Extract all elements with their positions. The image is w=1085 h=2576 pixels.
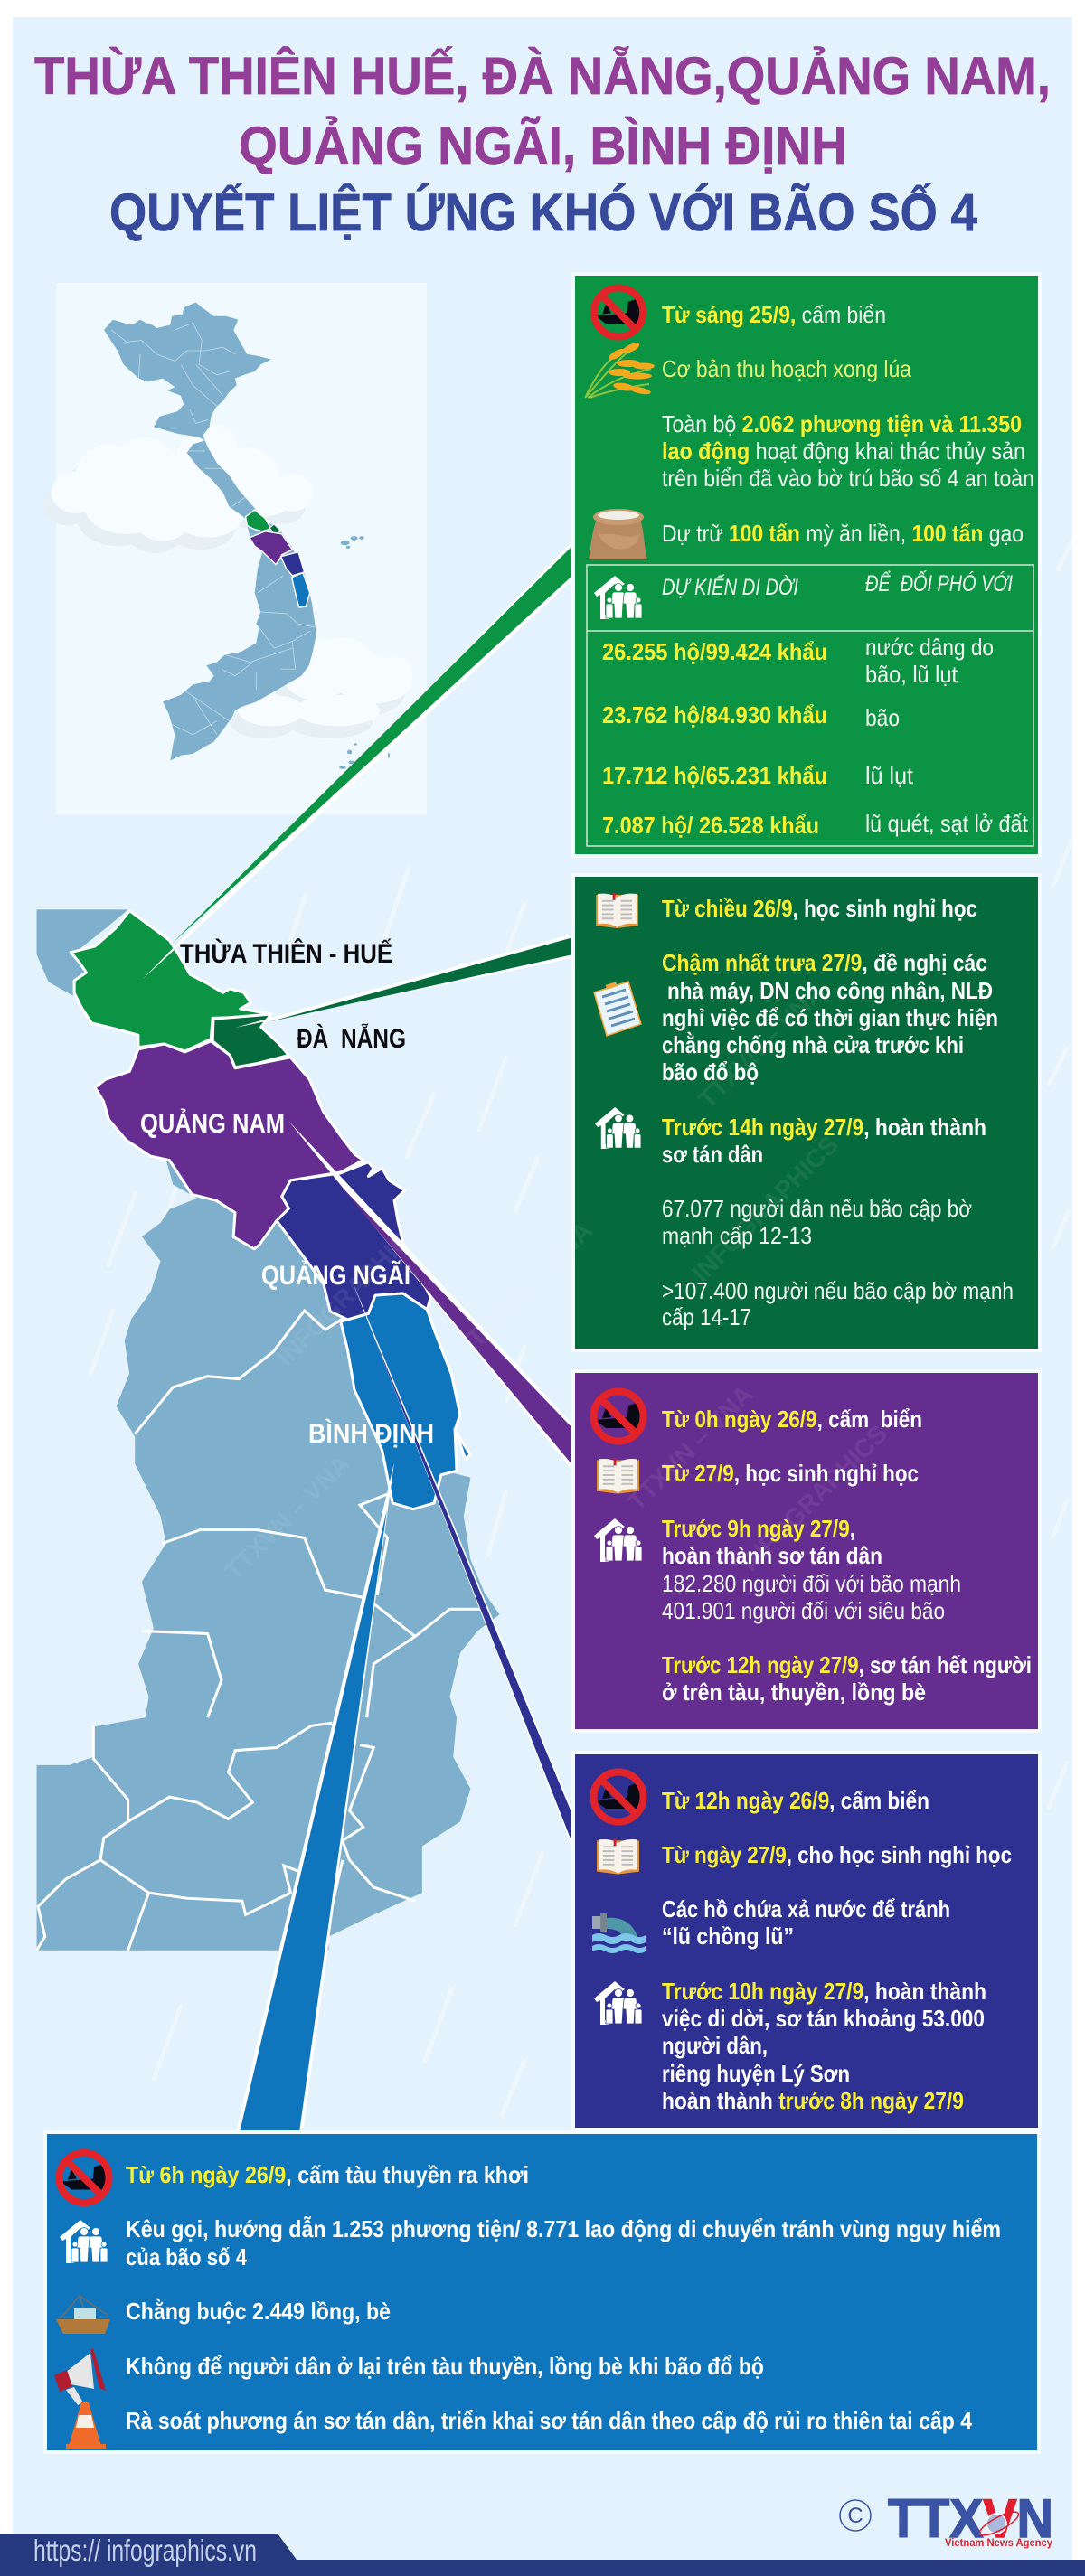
icon: rice sack: [589, 509, 647, 559]
footer url: https:// infographics.vn: [33, 2534, 257, 2567]
text: food reserve: Dự trữ 100 tấn mỳ ăn liền, 100 tấn gạo: [662, 520, 1024, 547]
text: evacuation deadline: [662, 1978, 986, 2114]
neighbouring provinces: [37, 909, 500, 1951]
icon: rice: [585, 341, 655, 398]
title: QUẢNG NGÃI, BÌNH ĐỊNH: [239, 117, 847, 175]
text: evacuation deadline: Trước 14h ngày 27/9, hoàn thành: [662, 1114, 986, 1141]
table header: ĐỂ ĐỐI PHÓ VỚI: [865, 569, 1013, 597]
text: evacuation deadline: việc di dời, sơ tán khoảng 53.000: [662, 2005, 985, 2032]
icon: family and house: [594, 1518, 642, 1562]
text: no residents on boats: Không để người dân ở lại trên tàu thuyền, lồng bè khi bão đổ bộ: [126, 2353, 764, 2380]
text: vessels ashore: trên biển đã vào bờ trú bão số 4 an toàn: [662, 465, 1034, 492]
text: vessels ashore: Toàn bộ 2.062 phương tiện và 11.350: [662, 410, 1022, 437]
icon: no boats: [60, 2153, 108, 2203]
table rows: nước dâng do: [865, 634, 994, 661]
icon: fishing boat: [56, 2296, 110, 2334]
text: evacuee numbers: >107.400 người nếu bão cập bờ mạnh: [662, 1277, 1014, 1304]
text: school closure: Từ chiều 26/9, học sinh nghỉ học: [662, 895, 977, 922]
text: factory leave: [662, 949, 998, 1086]
title: QUYẾT LIỆT ỨNG KHÓ VỚI BÃO SỐ 4: [109, 183, 977, 242]
table rows: 26.255 hộ/99.424 khẩu: [602, 638, 827, 665]
text: sea ban: Từ sáng 25/9, cấm biển: [662, 301, 886, 328]
table rows: lũ lụt: [865, 762, 914, 789]
table rows: lũ quét, sạt lở đất: [865, 810, 1029, 837]
text: evacuation deadline: người dân,: [662, 2032, 768, 2059]
icon: no boats: [593, 1392, 644, 1441]
panel: Quảng Nam: [573, 1371, 1040, 1731]
table: planned evacuation: [587, 565, 1033, 846]
panel: Quảng Ngãi: [573, 1753, 1040, 2129]
text: reservoir release: “lũ chồng lũ”: [662, 1923, 794, 1950]
map labels: QUẢNG NAM: [140, 1108, 285, 1139]
logo: TTXVN: TTXVN: [888, 2488, 1053, 2549]
map labels: [140, 938, 434, 1449]
title: THỪA THIÊN HUẾ, ĐÀ NẴNG,QUẢNG NAM,: [34, 47, 1051, 106]
text: school closure: Từ 27/9, học sinh nghỉ học: [662, 1460, 919, 1487]
table header: [662, 569, 1013, 600]
footer band: [0, 2534, 1085, 2576]
icon: traffic cone: [66, 2402, 106, 2449]
text: factory leave: chằng chống nhà cửa trước khi: [662, 1031, 964, 1058]
text: evacuation deadline: riêng huyện Lý Sơn: [662, 2060, 850, 2087]
watermarks: INFOGRAPHICS: [686, 1131, 844, 1287]
table header: DỰ KIẾN DI DỜI: [662, 573, 798, 600]
map labels: QUẢNG NGÃI: [261, 1260, 410, 1291]
text: evacuation deadline: 401.901 người đối với siêu bão: [662, 1597, 945, 1624]
text: vessel guidance: Kêu gọi, hướng dẫn 1.253 phương tiện/ 8.771 lao động di chuyển tránh vùng nguy hiểm: [126, 2215, 1001, 2242]
text: factory leave: Chậm nhất trưa 27/9, đề nghị các: [662, 949, 987, 976]
text: secure cages: Chằng buộc 2.449 lồng, bè: [126, 2298, 391, 2325]
text: evacuation deadline: Trước 9h ngày 27/9,: [662, 1515, 855, 1542]
map labels: ĐÀ NẴNG: [297, 1022, 406, 1054]
watermarks: TTXVN – VNA: [622, 1380, 759, 1516]
pointer: Bình Định: [236, 1462, 394, 2132]
icon: book: [597, 1838, 639, 1875]
text: evacuee numbers: mạnh cấp 12-13: [662, 1222, 812, 1249]
icon: family and house: [595, 1107, 641, 1149]
watermarks: INFOGRAPHICS: [270, 1215, 428, 1371]
text: vessels ashore: [662, 410, 1034, 492]
text: reservoir release: [662, 1895, 950, 1950]
text: review evacuation plan: Rà soát phương án sơ tán dân, triển khai sơ tán dân theo cấp độ rủi ro thiên tai cấp 4: [126, 2407, 972, 2434]
text: vessel guidance: [126, 2215, 1001, 2270]
rain streaks background: [90, 533, 1076, 2115]
icon: family and house: [60, 2220, 108, 2263]
map labels: BÌNH ĐỊNH: [308, 1418, 434, 1449]
text: clear boats and cages: ở trên tàu, thuyền, lồng bè: [662, 1678, 926, 1706]
table rows: 23.762 hộ/84.930 khẩu: [602, 701, 827, 729]
table rows: 7.087 hộ/ 26.528 khẩu: [602, 812, 819, 839]
map labels: THỪA THIÊN - HUẾ: [180, 938, 392, 969]
text: evacuation deadline: hoàn thành trước 8h ngày 27/9: [662, 2087, 964, 2114]
text: evacuation deadline: Trước 10h ngày 27/9, hoàn thành: [662, 1978, 986, 2005]
watermarks: TTXVN – VNA: [461, 1217, 598, 1352]
table rows: bão: [865, 704, 900, 731]
text: sea ban: Từ 12h ngày 26/9, cấm biển: [662, 1787, 929, 1814]
text: reservoir release: Các hồ chứa xả nước để tránh: [662, 1895, 950, 1923]
icon: megaphone: [54, 2348, 106, 2405]
icon: reservoir discharge: [592, 1913, 646, 1953]
clouds on locator map: [43, 423, 413, 738]
table rows: [602, 634, 1029, 839]
watermarks: TTXVN – VNA: [693, 978, 829, 1114]
icon: no boats: [593, 1772, 644, 1822]
pointer: Thừa Thiên Huế: [142, 541, 573, 980]
text: rice harvest: Cơ bản thu hoạch xong lúa: [662, 355, 911, 382]
icon: book: [596, 893, 638, 928]
text: evacuation deadline: 182.280 người đối với bão mạnh: [662, 1570, 961, 1597]
text: evacuation deadline: hoàn thành sơ tán dân: [662, 1542, 882, 1569]
large regional map: [37, 909, 500, 1951]
text: factory leave: nghỉ việc để có thời gian thực hiện: [662, 1004, 998, 1031]
panel: Bình Định: [45, 2132, 1039, 2452]
icon: book: [597, 1458, 639, 1494]
icon: no boats: [594, 287, 643, 337]
text: vessel guidance: của bão số 4: [126, 2243, 247, 2270]
text: clear boats and cages: Trước 12h ngày 27/9, sơ tán hết người: [662, 1651, 1032, 1678]
text: school closure: Từ ngày 27/9, cho học sinh nghỉ học: [662, 1841, 1012, 1868]
title: [34, 47, 1051, 242]
pointer: Đà Nẵng: [235, 934, 573, 1028]
table rows: 17.712 hộ/65.231 khẩu: [602, 762, 827, 789]
text: evacuee numbers: cấp 14-17: [662, 1303, 751, 1330]
logo: TTXVN: Vietnam News Agency: [945, 2536, 1052, 2549]
icon: family and house: [594, 576, 642, 619]
highlighted provinces: [71, 911, 470, 1509]
text: vessels ashore: lao động hoạt động khai thác thủy sản: [662, 437, 1025, 465]
text: evacuation deadline: [662, 1114, 986, 1168]
text: evacuee numbers: [662, 1195, 1014, 1330]
watermarks: INFOGRAPHICS: [735, 1420, 892, 1576]
icon: family and house: [594, 1981, 642, 2025]
icon: checklist: [594, 982, 641, 1036]
table rows: bão, lũ lụt: [865, 661, 958, 688]
pointer: Quảng Nam: [288, 1121, 573, 1471]
logo: TTXVN: C: [847, 2504, 863, 2528]
pointer: Quảng Ngãi: [352, 1280, 573, 1850]
watermarks: [219, 978, 892, 1585]
text: factory leave: bão đổ bộ: [662, 1058, 759, 1086]
text: evacuation deadline: sơ tán dân: [662, 1141, 763, 1168]
watermarks: TTXVN – VNA: [219, 1450, 355, 1585]
panel: Đà Nẵng: [573, 875, 1040, 1350]
text: factory leave: nhà máy, DN cho công nhân, NLĐ: [667, 977, 993, 1004]
mini map: country outline and highlighted provinces: [104, 302, 390, 769]
text: evacuee numbers: 67.077 người dân nếu bão cập bờ: [662, 1195, 972, 1222]
small Vietnam locator map: [43, 283, 427, 814]
text: sea ban: Từ 6h ngày 26/9, cấm tàu thuyền ra khơi: [126, 2161, 529, 2188]
text: sea ban: Từ 0h ngày 26/9, cấm biển: [662, 1406, 922, 1433]
text: evacuation deadline: [662, 1515, 961, 1624]
text: clear boats and cages: [662, 1651, 1032, 1706]
